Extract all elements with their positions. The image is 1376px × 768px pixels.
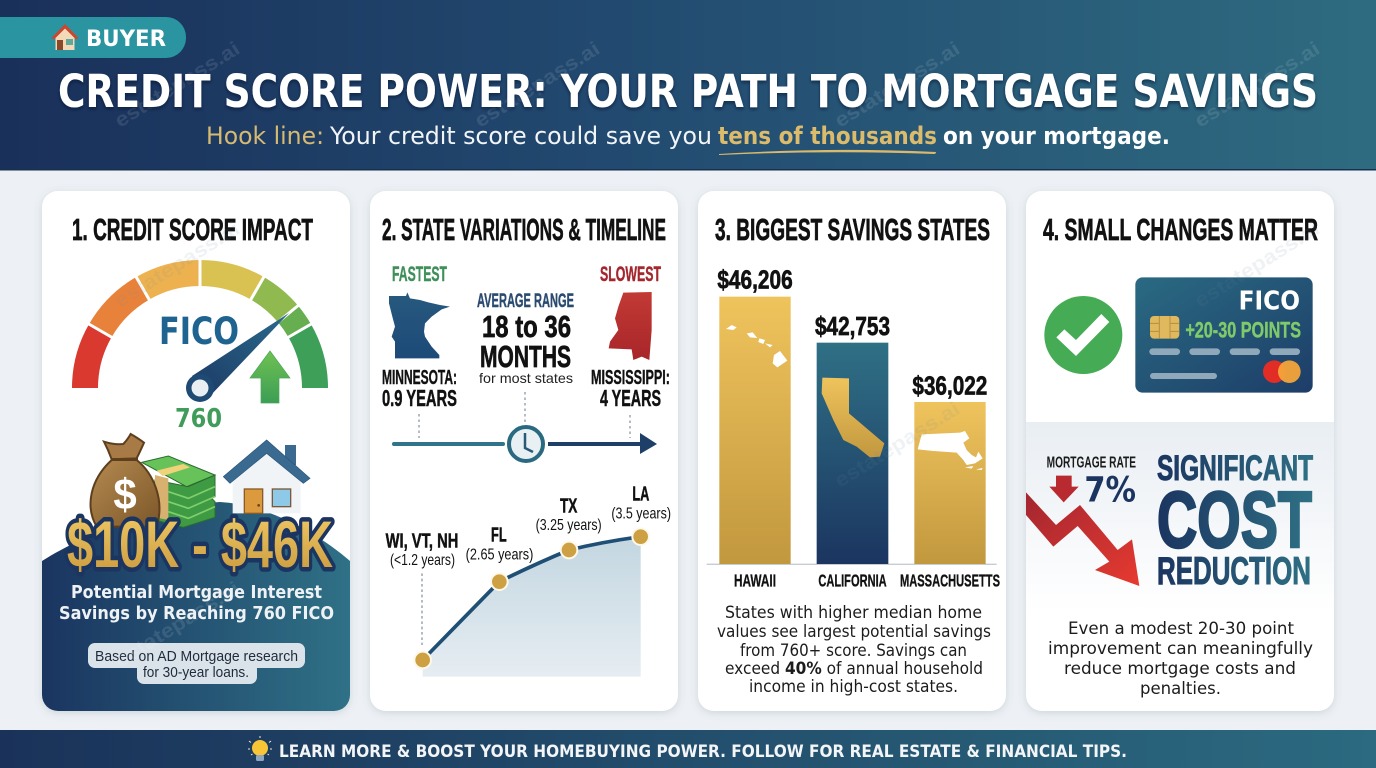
icon: money bag: $ <box>113 471 137 519</box>
hook line <box>206 122 1170 155</box>
description: values see largest potential savings <box>717 622 991 641</box>
average range <box>477 291 574 386</box>
bar: Hawaii: $46,206 <box>717 264 793 294</box>
slowest state: SLOWEST <box>600 263 661 286</box>
description: reduce mortgage costs and <box>1064 659 1296 678</box>
point: WI, VT, NH: WI, VT, NH <box>386 530 458 552</box>
icons: money bag, cash, house <box>91 434 310 527</box>
bar: Hawaii <box>717 264 793 591</box>
FICO logo: FICO <box>159 310 239 353</box>
hook line: on your mortgage. <box>943 122 1170 150</box>
slowest state <box>591 263 670 411</box>
description <box>1048 619 1313 698</box>
mortgage rate <box>1047 454 1136 511</box>
needle <box>186 313 289 402</box>
bar: Massachusetts: MASSACHUSETTS <box>900 571 1000 591</box>
header banner <box>0 0 1376 170</box>
icon: check mark <box>1044 296 1122 374</box>
description: from 760+ score. Savings can <box>740 641 967 660</box>
badge label: BUYER <box>86 27 166 52</box>
credit card: FICO <box>1239 286 1300 316</box>
call to action: LEARN MORE & BOOST YOUR HOMEBUYING POWER. FOLLOW FOR REAL ESTATE & FINANCIAL TIPS. <box>279 742 1127 762</box>
hook line: Your credit score could save you <box>329 122 712 150</box>
hook line: tens of thousands <box>718 122 937 150</box>
bar: California <box>815 311 890 591</box>
description: income in high-cost states. <box>749 677 958 696</box>
icon: house emoji <box>52 24 78 50</box>
score 760: 760 <box>175 404 222 434</box>
credit card: +20-30 POINTS <box>1185 317 1301 342</box>
source note: Based on AD Mortgage research <box>95 649 298 665</box>
source note: for 30-year loans. <box>143 665 249 681</box>
slowest state: MISSISSIPPI: <box>591 367 670 389</box>
savings description <box>59 582 334 624</box>
icon: cash stack <box>142 456 215 527</box>
header banner: estatepass.ai <box>831 38 964 132</box>
point: TX <box>536 495 602 534</box>
header banner: estatepass.ai <box>471 38 604 132</box>
panel: credit score impact <box>42 191 350 711</box>
cost reduction statement <box>1157 449 1313 593</box>
point: TX: (3.25 years) <box>536 517 602 534</box>
icon: house <box>223 440 310 513</box>
description: improvement can meaningfully <box>1048 639 1313 658</box>
panel: state variations and timeline <box>370 191 678 711</box>
icon: money bag <box>91 434 159 527</box>
icon: clock <box>509 427 543 461</box>
hill background <box>42 502 350 711</box>
description: Even a modest 20-30 point <box>1068 619 1295 638</box>
bar: Hawaii: HAWAII <box>734 571 776 591</box>
mortgage rate: MORTGAGE RATE <box>1047 454 1136 471</box>
description: States with higher median home <box>725 603 982 622</box>
average range: MONTHS <box>480 339 571 374</box>
fastest state: FASTEST <box>392 263 447 286</box>
map: Mississippi <box>609 292 652 360</box>
header banner: estatepass.ai <box>1191 38 1324 132</box>
heading: 1. CREDIT SCORE IMPACT <box>72 212 313 247</box>
fastest state: MINNESOTA: <box>382 367 457 389</box>
bar: Massachusetts: $36,022 <box>912 370 987 400</box>
savings range: $10K - $46K <box>67 507 333 581</box>
header banner: estatepass.ai <box>111 38 244 132</box>
panel: credit score impact: estatepass.ai <box>111 578 244 672</box>
point: LA <box>611 483 671 523</box>
heading: 2. STATE VARIATIONS & TIMELINE <box>382 212 666 247</box>
hook line: Hook line: <box>206 122 324 150</box>
heading: 3. BIGGEST SAVINGS STATES <box>715 212 990 247</box>
footer banner <box>0 730 1376 768</box>
point: WI, VT, NH <box>386 530 458 569</box>
point: FL: (2.65 years) <box>466 546 533 563</box>
description <box>717 603 991 696</box>
source note <box>88 643 305 684</box>
line chart <box>386 483 671 677</box>
point: FL <box>466 524 533 563</box>
panel: small changes matter <box>1026 191 1334 711</box>
panel: biggest savings states <box>698 191 1006 711</box>
savings description: Potential Mortgage Interest <box>71 582 322 603</box>
bar: Massachusetts <box>900 370 1000 591</box>
up arrow <box>250 351 290 403</box>
gauge <box>72 258 328 434</box>
fastest state: 0.9 YEARS <box>382 385 457 411</box>
point: FL: FL <box>491 524 507 547</box>
description: penalties. <box>1140 679 1221 698</box>
bar: California: CALIFORNIA <box>818 571 887 591</box>
falling arrow <box>1026 492 1139 586</box>
average range: for most states <box>479 370 573 386</box>
cost reduction statement: COST <box>1157 475 1312 564</box>
savings description: Savings by Reaching 760 FICO <box>59 603 334 624</box>
description: exceed 40% of annual household <box>725 659 983 678</box>
point: TX: TX <box>560 495 577 518</box>
cost reduction statement: SIGNIFICANT <box>1157 449 1313 488</box>
credit card <box>1135 277 1313 393</box>
bar chart <box>707 264 1000 591</box>
point: LA: LA <box>632 483 649 506</box>
panel: credit score impact: estatepass.ai <box>111 218 244 312</box>
point: WI, VT, NH: (<1.2 years) <box>390 552 455 569</box>
lower section background <box>1026 422 1334 612</box>
panel: small changes matter: estatepass.ai <box>1191 218 1324 312</box>
slowest state: 4 YEARS <box>600 385 661 411</box>
mortgage rate: 7% <box>1084 471 1136 511</box>
bar: California: $42,753 <box>815 311 890 341</box>
point: LA: (3.5 years) <box>611 506 671 523</box>
average range: 18 to 36 <box>482 309 571 344</box>
map: Minnesota <box>389 292 450 358</box>
average range: AVERAGE RANGE <box>477 291 574 312</box>
panel: biggest savings states: estatepass.ai <box>831 398 964 492</box>
timeline arrow <box>394 392 657 461</box>
badge: buyer <box>0 17 186 58</box>
fastest state <box>382 263 457 411</box>
icon: light bulb <box>248 736 272 761</box>
